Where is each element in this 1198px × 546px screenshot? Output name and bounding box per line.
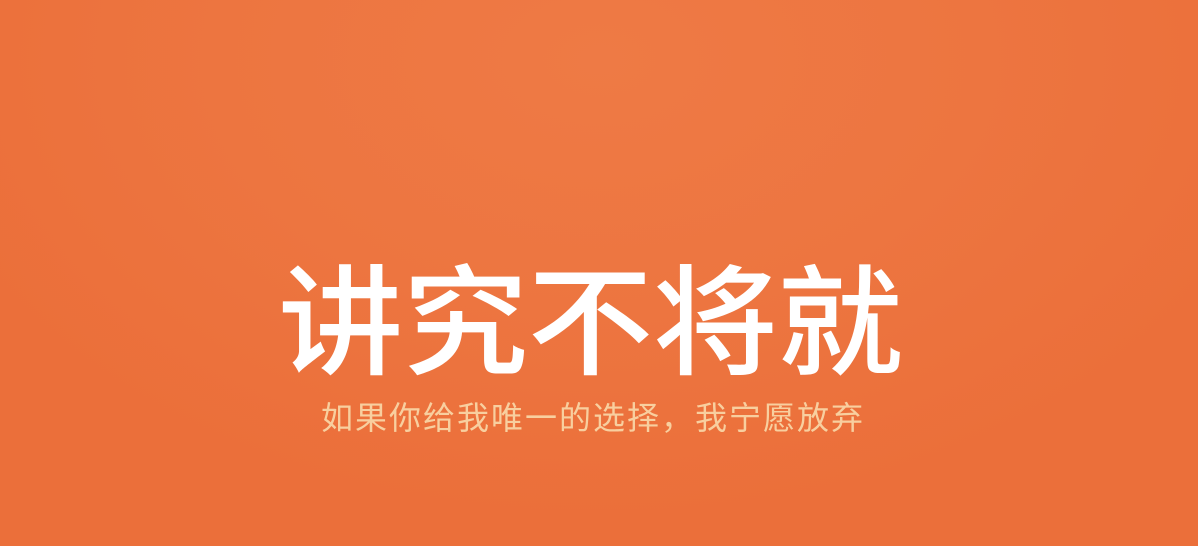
subtitle text: 如果你给我唯一的选择，我宁愿放弃 xyxy=(321,400,865,436)
title: 讲究不将就 xyxy=(278,257,902,391)
